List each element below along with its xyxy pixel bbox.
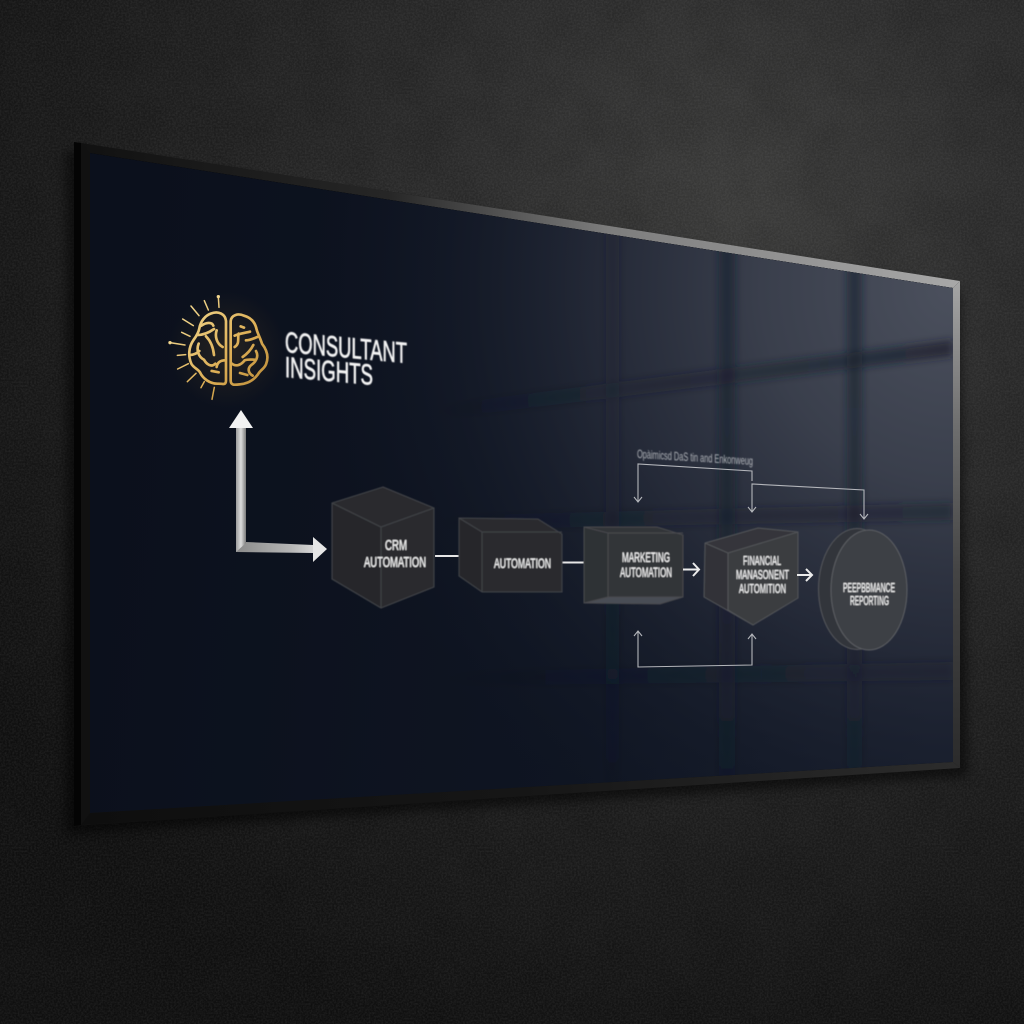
step 3: marketing automation box — [584, 527, 683, 604]
icon: golden brain with rays — [168, 292, 285, 408]
step 5: performance reporting disc: REPORTING — [850, 594, 889, 608]
step 4: financial management box: FINANCIAL — [743, 554, 781, 568]
step 2: automation box: AUTOMATION — [494, 555, 551, 571]
step 4: financial management box: MANASONENT — [736, 568, 789, 582]
arrow: marketing to financial — [683, 563, 699, 576]
glass screen with window reflection — [90, 153, 953, 813]
step 3: marketing automation box: AUTOMATION — [620, 565, 672, 580]
title: consultant insights: INSIGHTS — [285, 352, 373, 392]
step 1: CRM automation cube: CRM — [385, 538, 407, 554]
step 4: financial management box — [704, 528, 798, 625]
feedback loop: caption: Opàimicsd DaS tin and Enkonweug — [637, 449, 753, 468]
step 1: CRM automation cube — [332, 487, 434, 608]
step 2: automation box — [459, 518, 562, 592]
arrow: financial to performance — [797, 569, 812, 581]
title: consultant insights: CONSULTANT — [285, 327, 407, 370]
step 5: performance reporting disc — [818, 528, 907, 650]
flow connectors — [435, 556, 584, 562]
wall-mounted display frame — [66, 142, 968, 834]
arrow: metallic L-shaped arrow — [229, 410, 327, 562]
feedback loop: lower bracket lines and arrows — [634, 631, 756, 667]
logo: brain icon and title — [168, 292, 407, 408]
feedback loop: upper bracket lines and arrows — [634, 464, 868, 519]
step 4: financial management box: AUTOMITION — [739, 582, 786, 596]
step 1: CRM automation cube: AUTOMATION — [364, 555, 426, 571]
title: consultant insights — [285, 327, 407, 395]
step 5: performance reporting disc: PEEPBBMANCE — [843, 581, 895, 595]
step 3: marketing automation box: MARKETING — [622, 550, 670, 565]
